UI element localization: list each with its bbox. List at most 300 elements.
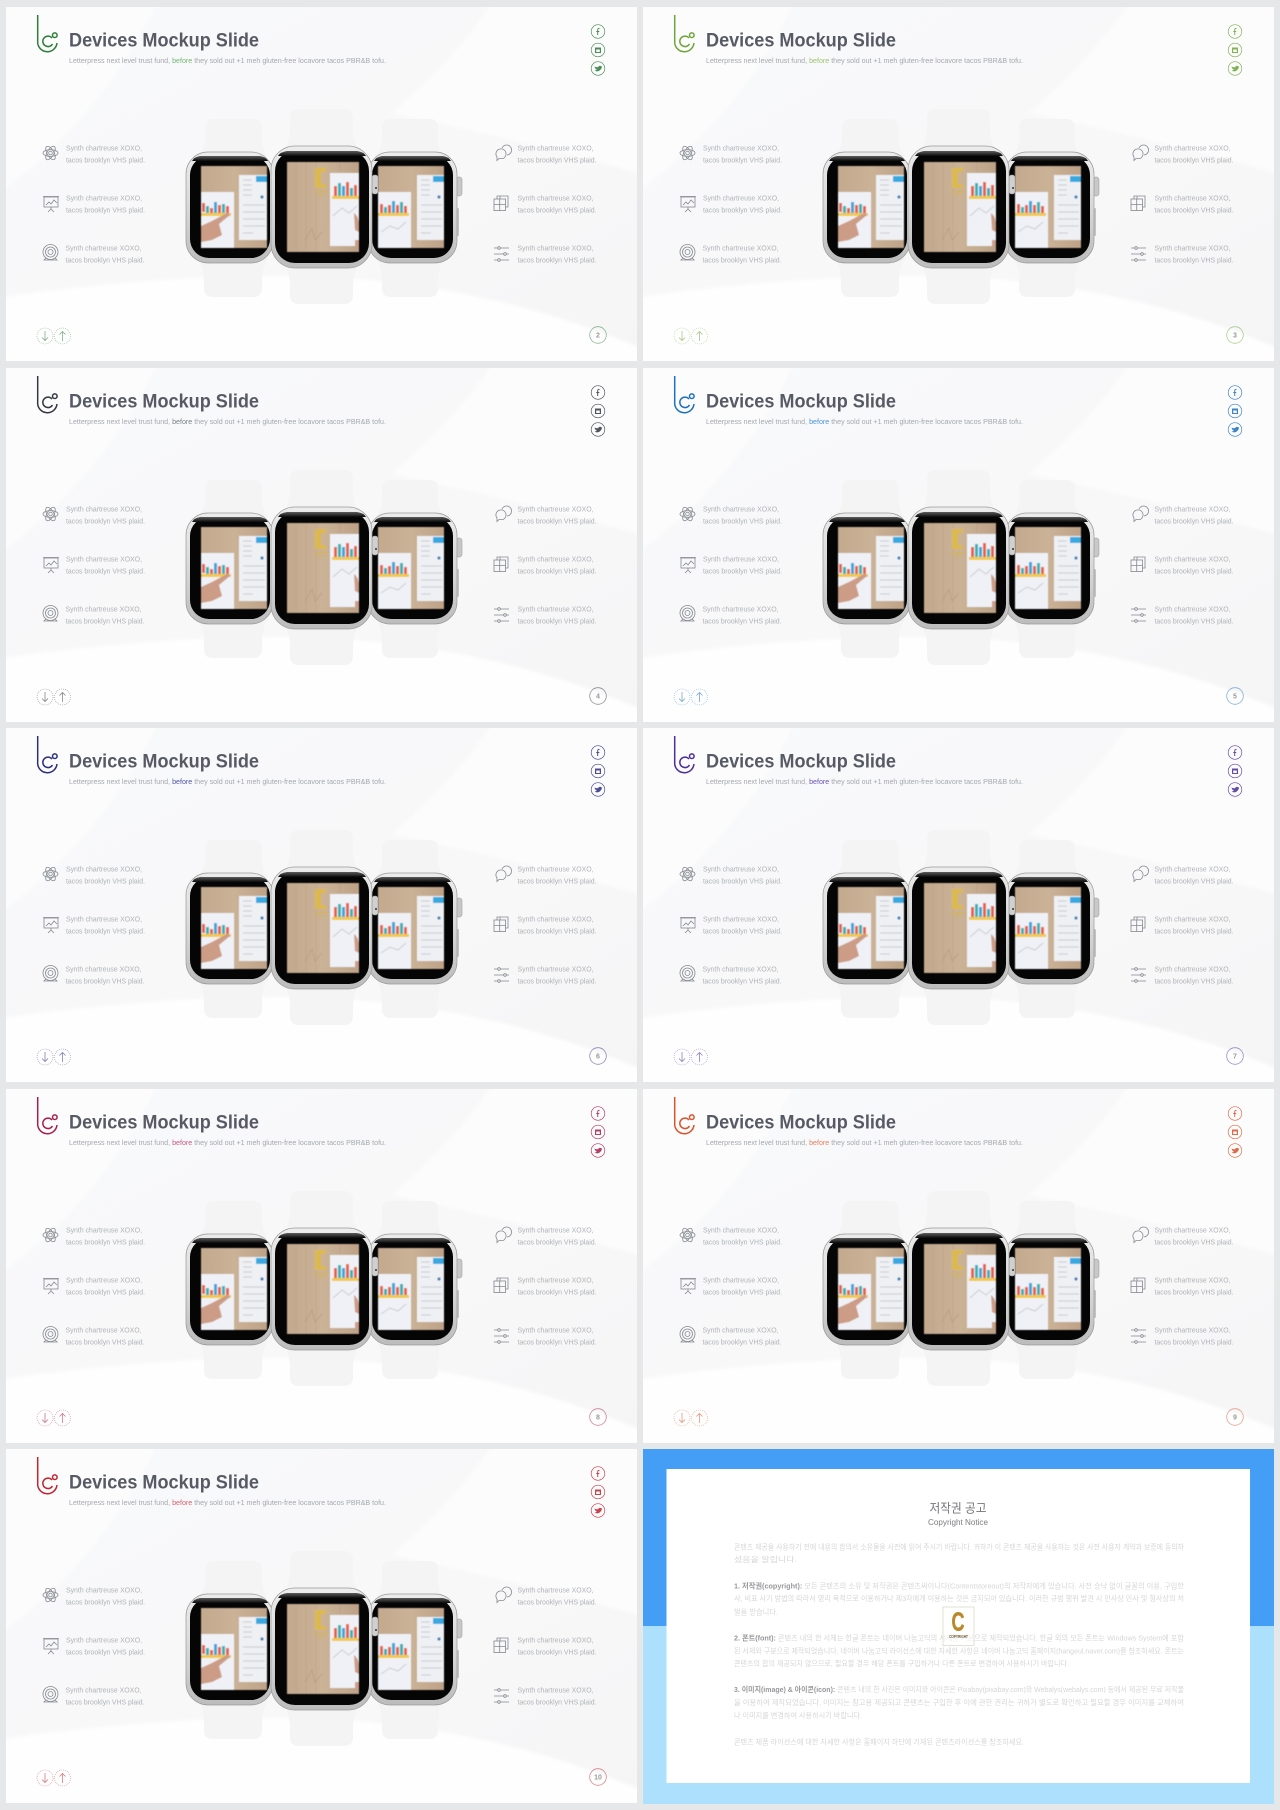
text: feature 3 bbox=[66, 964, 144, 986]
social icons bbox=[591, 25, 605, 75]
text: feature 3: Synth chartreuse XOXO, bbox=[702, 604, 778, 613]
text: feature 2: tacos brooklyn VHS plaid. bbox=[66, 206, 145, 214]
notice section 2: font bbox=[734, 1632, 1184, 1668]
notice section 3: image and icon: 을 이용하여 제작되었습니다. 이미지는 참고용 제공되고 콘텐츠는 구입한 후 이에 관한 권리는 귀하가 별도로 확인하고 필요할 경우 이미지를 교체하여 bbox=[734, 1697, 1184, 1707]
text: feature 3: Synth chartreuse XOXO, bbox=[66, 964, 142, 974]
text: feature 2: Synth chartreuse XOXO, bbox=[66, 554, 142, 563]
text: feature 6: tacos brooklyn VHS plaid. bbox=[518, 1698, 596, 1706]
subtitle: Letterpress next level trust fund, before they sold out +1 meh gluten-free locavore tacos PBR&B tofu. bbox=[706, 777, 1023, 786]
notice intro bbox=[734, 1542, 1184, 1564]
text: feature 1: tacos brooklyn VHS plaid. bbox=[66, 156, 145, 164]
page number bbox=[590, 687, 606, 704]
icon: presentation bbox=[43, 1638, 59, 1654]
text: feature 1: tacos brooklyn VHS plaid. bbox=[703, 516, 782, 525]
icon: atom bbox=[43, 145, 58, 161]
text: feature 5 bbox=[518, 1636, 596, 1656]
text: feature 5 bbox=[1154, 194, 1234, 214]
text: feature 2: Synth chartreuse XOXO, bbox=[703, 914, 779, 924]
icon: target bbox=[680, 1326, 695, 1342]
icon: layers bbox=[494, 1278, 508, 1292]
icon: sliders bbox=[1131, 968, 1146, 982]
notice heading: 저작권 공고 bbox=[930, 1502, 986, 1516]
text: feature 4: Synth chartreuse XOXO, bbox=[518, 144, 594, 152]
text: feature 5 bbox=[1154, 914, 1234, 936]
notice section 2: font: 콘텐츠의 합의 제공되지 않으므로, 필요할 경우 해당 폰트를 구입하거나 다른 폰트로 변경하여 사용하시기 바랍니다. bbox=[734, 1658, 1069, 1668]
text: feature 6 bbox=[518, 604, 596, 625]
text: feature 1: tacos brooklyn VHS plaid. bbox=[703, 156, 782, 164]
text: feature 2: Synth chartreuse XOXO, bbox=[66, 1275, 142, 1284]
icon: layers bbox=[1131, 196, 1145, 210]
text: feature 4: tacos brooklyn VHS plaid. bbox=[518, 156, 596, 164]
text: feature 1: Synth chartreuse XOXO, bbox=[703, 504, 779, 513]
nav arrows bbox=[674, 1410, 708, 1426]
icon: target bbox=[43, 605, 58, 620]
text: feature 1: Synth chartreuse XOXO, bbox=[703, 144, 779, 152]
text: feature 4: Synth chartreuse XOXO, bbox=[1154, 504, 1230, 513]
text: feature 4: Synth chartreuse XOXO, bbox=[518, 864, 594, 874]
subtitle: Letterpress next level trust fund, before they sold out +1 meh gluten-free locavore tacos PBR&B tofu. bbox=[69, 416, 386, 426]
title: Devices Mockup Slide bbox=[69, 752, 259, 772]
text: feature 5: tacos brooklyn VHS plaid. bbox=[1154, 926, 1234, 936]
text: feature 2: tacos brooklyn VHS plaid. bbox=[66, 566, 145, 575]
right watch bbox=[368, 480, 462, 658]
right watch bbox=[368, 1561, 462, 1739]
nav arrows bbox=[674, 328, 708, 344]
text: feature 2 bbox=[66, 1275, 145, 1296]
text: feature 3 bbox=[702, 1325, 782, 1346]
nav arrows bbox=[674, 688, 708, 704]
text: feature 5: tacos brooklyn VHS plaid. bbox=[1154, 566, 1234, 575]
text: feature 4: tacos brooklyn VHS plaid. bbox=[1154, 156, 1234, 164]
icon: layers bbox=[1131, 556, 1145, 571]
right watch bbox=[1005, 1200, 1099, 1378]
social icons bbox=[1228, 385, 1242, 436]
notice footer line: 콘텐츠 제품 라이선스에 대한 자세한 사항은 홈페이지 하단에 기재된 콘텐츠라이선스를 참조하세요. bbox=[734, 1736, 1024, 1746]
text: feature 2 bbox=[703, 554, 782, 575]
page number: 2 bbox=[596, 332, 600, 340]
text: feature 2 bbox=[66, 554, 145, 575]
center watch bbox=[271, 1551, 378, 1746]
text: feature 2 bbox=[66, 1636, 145, 1656]
social icons bbox=[1228, 25, 1242, 75]
panel: slide 8 crimson bbox=[6, 1089, 637, 1443]
text: feature 3: Synth chartreuse XOXO, bbox=[702, 1325, 778, 1334]
text: feature 5 bbox=[1154, 1275, 1234, 1296]
text: feature 2: Synth chartreuse XOXO, bbox=[66, 914, 142, 924]
center watch bbox=[908, 109, 1015, 304]
text: feature 6: tacos brooklyn VHS plaid. bbox=[518, 1337, 596, 1346]
text: feature 3: Synth chartreuse XOXO, bbox=[66, 244, 142, 252]
page number bbox=[590, 1769, 606, 1785]
title: Devices Mockup Slide bbox=[69, 30, 259, 52]
icon: atom bbox=[43, 505, 58, 522]
text: feature 6: tacos brooklyn VHS plaid. bbox=[1154, 1337, 1234, 1346]
text: feature 6: Synth chartreuse XOXO, bbox=[1154, 964, 1230, 974]
notice section 1: copyright: 벌을 받습니다. bbox=[734, 1606, 778, 1616]
text: feature 3: Synth chartreuse XOXO, bbox=[66, 604, 142, 613]
page number: 9 bbox=[1233, 1414, 1237, 1421]
text: feature 3: tacos brooklyn VHS plaid. bbox=[702, 256, 782, 264]
text: feature 1: tacos brooklyn VHS plaid. bbox=[703, 876, 782, 886]
icon: chat bbox=[1133, 506, 1149, 521]
right watch bbox=[1005, 480, 1099, 658]
icon: atom bbox=[680, 505, 695, 522]
text: feature 4 bbox=[518, 864, 596, 886]
text: feature 2: Synth chartreuse XOXO, bbox=[703, 1275, 779, 1284]
logo bbox=[38, 1096, 57, 1133]
panel: slide 4 charcoal bbox=[6, 368, 637, 722]
icon: presentation bbox=[680, 557, 696, 572]
icon: layers bbox=[1131, 917, 1145, 932]
text: feature 1 bbox=[66, 504, 145, 525]
text: feature 1: tacos brooklyn VHS plaid. bbox=[703, 1237, 782, 1246]
page number bbox=[1227, 327, 1243, 343]
text: feature 6 bbox=[1154, 1325, 1234, 1346]
notice section 1: copyright: 1. 저작권(copyright): 모든 콘텐츠의 소유 및 저작권은 콘텐츠싸이니다(Contentstoreout)의 저작자에게 있습니다. 사전 승낙 없이 글꼴의 이용, 구입한 bbox=[734, 1580, 1184, 1590]
page number: 6 bbox=[596, 1054, 600, 1060]
icon: presentation bbox=[680, 196, 696, 212]
text: feature 3 bbox=[702, 244, 782, 264]
nav arrows bbox=[37, 1410, 70, 1426]
panel: slide 9 orange bbox=[643, 1089, 1274, 1443]
text: feature 3: Synth chartreuse XOXO, bbox=[66, 1686, 142, 1694]
watermark: gold C bbox=[943, 1606, 974, 1646]
title: Devices Mockup Slide bbox=[706, 30, 896, 52]
logo bbox=[675, 15, 694, 52]
text: feature 4 bbox=[518, 1225, 596, 1246]
text: feature 2 bbox=[703, 1275, 782, 1296]
icon: sliders bbox=[494, 247, 509, 261]
text: feature 6: tacos brooklyn VHS plaid. bbox=[1154, 976, 1234, 986]
page number: 8 bbox=[596, 1414, 600, 1421]
notice section 3: image and icon: 3. 이미지(image) & 아이콘(icon): 콘텐츠 내의 한 사진은 이미지와 아이콘은 Pixabay(pixabay.com)와 Webalys(webalys.com) 등에서 제공된 무료 저작물 bbox=[734, 1684, 1184, 1694]
left watch bbox=[823, 1200, 910, 1378]
text: feature 6 bbox=[1154, 244, 1234, 264]
page number bbox=[590, 1408, 606, 1425]
text: feature 2: Synth chartreuse XOXO, bbox=[703, 554, 779, 563]
text: feature 4 bbox=[1154, 504, 1234, 525]
text: feature 3 bbox=[66, 244, 144, 264]
subtitle: Letterpress next level trust fund, before they sold out +1 meh gluten-free locavore tacos PBR&B tofu. bbox=[706, 56, 1023, 65]
center watch bbox=[271, 830, 378, 1025]
subtitle: Letterpress next level trust fund, before they sold out +1 meh gluten-free locavore tacos PBR&B tofu. bbox=[69, 777, 386, 786]
left watch bbox=[186, 119, 273, 297]
text: feature 3: tacos brooklyn VHS plaid. bbox=[66, 616, 144, 625]
page number bbox=[1227, 687, 1243, 704]
text: feature 6: Synth chartreuse XOXO, bbox=[518, 1325, 594, 1334]
notice subheading: Copyright Notice bbox=[928, 1517, 988, 1527]
notice section 1: copyright: 사, 비표 사기 방법의 따라서 영리 목적으로 이용하거나 제3자에게 이용하는 것은 금지되어 있습니다. 이러한 규범 행위 발견 시 민사상 민사 및 형사상의 처 bbox=[734, 1593, 1184, 1603]
panel: slide 10 red bbox=[6, 1449, 637, 1803]
nav arrows bbox=[37, 688, 70, 704]
text: feature 1: Synth chartreuse XOXO, bbox=[703, 864, 779, 874]
text: feature 3: tacos brooklyn VHS plaid. bbox=[66, 1337, 144, 1346]
logo bbox=[675, 376, 694, 412]
page number: 3 bbox=[1233, 332, 1237, 340]
icon: chat bbox=[496, 506, 512, 521]
text: feature 1: Synth chartreuse XOXO, bbox=[66, 1225, 142, 1234]
subtitle: Letterpress next level trust fund, before they sold out +1 meh gluten-free locavore tacos PBR&B tofu. bbox=[706, 416, 1023, 426]
logo bbox=[38, 1457, 57, 1494]
text: feature 3: tacos brooklyn VHS plaid. bbox=[66, 1698, 144, 1706]
text: feature 5: Synth chartreuse XOXO, bbox=[518, 194, 594, 202]
left watch bbox=[823, 480, 910, 658]
text: feature 4: tacos brooklyn VHS plaid. bbox=[518, 1237, 596, 1246]
text: feature 1: tacos brooklyn VHS plaid. bbox=[66, 1237, 145, 1246]
text: feature 2: Synth chartreuse XOXO, bbox=[703, 194, 779, 202]
icon: chat bbox=[496, 1587, 512, 1602]
text: feature 2 bbox=[66, 914, 145, 936]
page number bbox=[590, 1048, 606, 1064]
text: feature 5: tacos brooklyn VHS plaid. bbox=[1154, 1287, 1234, 1296]
icon: target bbox=[680, 244, 695, 260]
center watch bbox=[271, 1190, 378, 1386]
subtitle: Letterpress next level trust fund, before they sold out +1 meh gluten-free locavore tacos PBR&B tofu. bbox=[706, 1138, 1023, 1146]
text: feature 6: Synth chartreuse XOXO, bbox=[1154, 1325, 1230, 1334]
left watch bbox=[186, 480, 273, 658]
page number bbox=[1227, 1048, 1243, 1064]
text: feature 4: tacos brooklyn VHS plaid. bbox=[518, 876, 596, 886]
icon: sliders bbox=[1131, 247, 1146, 261]
icon: layers bbox=[494, 1638, 508, 1652]
text: feature 5: Synth chartreuse XOXO, bbox=[518, 1275, 594, 1284]
icon: layers bbox=[494, 196, 508, 210]
text: feature 4: Synth chartreuse XOXO, bbox=[1154, 1225, 1230, 1234]
text: feature 3 bbox=[66, 1686, 144, 1706]
text: feature 3: tacos brooklyn VHS plaid. bbox=[66, 976, 144, 986]
text: feature 6: tacos brooklyn VHS plaid. bbox=[1154, 616, 1234, 625]
icon: atom bbox=[43, 1226, 58, 1243]
social icons bbox=[591, 385, 605, 436]
text: feature 4 bbox=[1154, 864, 1234, 886]
text: feature 4: Synth chartreuse XOXO, bbox=[518, 1586, 594, 1594]
text: feature 1 bbox=[66, 144, 145, 164]
nav arrows bbox=[37, 1770, 70, 1786]
center watch bbox=[908, 830, 1015, 1025]
right watch bbox=[368, 840, 462, 1018]
left watch bbox=[186, 1200, 273, 1378]
center watch bbox=[908, 1190, 1015, 1386]
title: Devices Mockup Slide bbox=[706, 1112, 896, 1133]
text: feature 6 bbox=[518, 964, 596, 986]
logo bbox=[38, 15, 57, 52]
nav arrows bbox=[37, 1049, 70, 1065]
text: feature 6 bbox=[1154, 964, 1234, 986]
title: Devices Mockup Slide bbox=[706, 391, 896, 412]
icon: presentation bbox=[680, 918, 696, 933]
center watch bbox=[271, 470, 378, 664]
panel: slide 5 blue bbox=[643, 368, 1274, 722]
watermark: gold C: C bbox=[952, 1606, 965, 1636]
icon: atom bbox=[680, 866, 695, 882]
left watch bbox=[186, 1561, 273, 1739]
icon: chat bbox=[1133, 866, 1149, 882]
icon: target bbox=[43, 1326, 58, 1342]
text: feature 5: Synth chartreuse XOXO, bbox=[1154, 194, 1230, 202]
icon: atom bbox=[680, 145, 695, 161]
icon: presentation bbox=[43, 557, 59, 572]
text: feature 6: Synth chartreuse XOXO, bbox=[518, 964, 594, 974]
panel: slide 3 light green bbox=[643, 7, 1274, 361]
notice section 3: image and icon: 나 이미지를 변경하여 사용하시기 바랍니다. bbox=[734, 1710, 862, 1720]
text: feature 2: tacos brooklyn VHS plaid. bbox=[66, 1287, 145, 1296]
center watch bbox=[908, 470, 1015, 664]
text: feature 3: Synth chartreuse XOXO, bbox=[66, 1325, 142, 1334]
text: feature 2: Synth chartreuse XOXO, bbox=[66, 1636, 142, 1644]
text: feature 2: tacos brooklyn VHS plaid. bbox=[66, 926, 145, 936]
notice section 2: font: 된 서체와 구분으로 제작되었습니다. 네이버 나눔고딕 라이선스에 대한 자세한 사항은 네이버 나눔고딕 홈페이지(hangeul.naver.com)를 참조하세요. 폰트는 bbox=[734, 1646, 1184, 1656]
icon: layers bbox=[494, 556, 508, 571]
page number: 4 bbox=[596, 693, 600, 700]
text: feature 4: tacos brooklyn VHS plaid. bbox=[1154, 876, 1234, 886]
icon: chat bbox=[496, 1227, 512, 1242]
text: feature 4: tacos brooklyn VHS plaid. bbox=[518, 516, 596, 525]
panel: slide 7 purple bbox=[643, 728, 1274, 1082]
icon: presentation bbox=[43, 196, 59, 212]
icon: chat bbox=[496, 866, 512, 882]
text: feature 5: tacos brooklyn VHS plaid. bbox=[518, 926, 596, 936]
text: feature 1 bbox=[703, 864, 782, 886]
text: feature 3: Synth chartreuse XOXO, bbox=[702, 244, 778, 252]
icon: layers bbox=[494, 917, 508, 932]
icon: target bbox=[680, 966, 695, 981]
icon: chat bbox=[1133, 1227, 1149, 1242]
title: Devices Mockup Slide bbox=[69, 1472, 259, 1494]
icon: atom bbox=[43, 866, 58, 882]
text: feature 3 bbox=[702, 604, 782, 625]
right watch bbox=[1005, 840, 1099, 1018]
right watch bbox=[368, 119, 462, 297]
text: feature 5: Synth chartreuse XOXO, bbox=[1154, 914, 1230, 924]
icon: target bbox=[43, 244, 58, 260]
notice intro: 셨음을 알립니다. bbox=[734, 1554, 797, 1564]
icon: sliders bbox=[494, 1328, 509, 1343]
text: feature 1: Synth chartreuse XOXO, bbox=[66, 504, 142, 513]
text: feature 1 bbox=[703, 144, 782, 164]
social icons bbox=[1228, 1106, 1242, 1157]
social icons bbox=[1228, 746, 1242, 796]
text: feature 1 bbox=[703, 1225, 782, 1246]
text: feature 5: tacos brooklyn VHS plaid. bbox=[518, 1287, 596, 1296]
text: feature 4: tacos brooklyn VHS plaid. bbox=[1154, 1237, 1234, 1246]
text: feature 4: Synth chartreuse XOXO, bbox=[1154, 144, 1230, 152]
text: feature 5: Synth chartreuse XOXO, bbox=[518, 554, 594, 563]
text: feature 6 bbox=[1154, 604, 1234, 625]
text: feature 5: Synth chartreuse XOXO, bbox=[1154, 554, 1230, 563]
text: feature 6 bbox=[518, 1686, 596, 1706]
text: feature 4: tacos brooklyn VHS plaid. bbox=[1154, 516, 1234, 525]
text: feature 3: tacos brooklyn VHS plaid. bbox=[66, 256, 144, 264]
text: feature 2 bbox=[703, 914, 782, 936]
text: feature 3 bbox=[702, 964, 782, 986]
text: feature 1: Synth chartreuse XOXO, bbox=[66, 864, 142, 874]
icon: atom bbox=[43, 1587, 58, 1603]
social icons bbox=[591, 746, 605, 796]
notice section 2: font: 2. 폰트(font): 콘텐츠 내의 한 서체는 한글 폰트는 네이버 나눔고딕의 서체를 기본으로 제작되었습니다. 한글 외의 모든 폰트는 Windows System에 포함 bbox=[734, 1632, 1184, 1642]
text: feature 4: Synth chartreuse XOXO, bbox=[1154, 864, 1230, 874]
text: feature 5 bbox=[518, 914, 596, 936]
text: feature 3: Synth chartreuse XOXO, bbox=[702, 964, 778, 974]
icon: chat bbox=[496, 145, 512, 160]
text: feature 2: tacos brooklyn VHS plaid. bbox=[703, 1287, 782, 1296]
text: feature 5: Synth chartreuse XOXO, bbox=[1154, 1275, 1230, 1284]
text: feature 3: tacos brooklyn VHS plaid. bbox=[702, 1337, 782, 1346]
notice section 3: image and icon bbox=[734, 1684, 1184, 1720]
text: feature 6: tacos brooklyn VHS plaid. bbox=[518, 976, 596, 986]
text: feature 6: Synth chartreuse XOXO, bbox=[518, 244, 594, 252]
page number: 10 bbox=[594, 1774, 602, 1782]
text: feature 6: Synth chartreuse XOXO, bbox=[518, 1686, 594, 1694]
text: feature 6: Synth chartreuse XOXO, bbox=[1154, 244, 1230, 252]
text: feature 1 bbox=[703, 504, 782, 525]
text: feature 1: Synth chartreuse XOXO, bbox=[66, 144, 142, 152]
subtitle: Letterpress next level trust fund, before they sold out +1 meh gluten-free locavore tacos PBR&B tofu. bbox=[69, 56, 386, 65]
text: feature 5: tacos brooklyn VHS plaid. bbox=[518, 566, 596, 575]
text: feature 1: Synth chartreuse XOXO, bbox=[703, 1225, 779, 1234]
page number: 7 bbox=[1233, 1054, 1237, 1060]
icon: chat bbox=[1133, 145, 1149, 160]
page number bbox=[590, 327, 606, 343]
title: Devices Mockup Slide bbox=[706, 752, 896, 772]
icon: presentation bbox=[43, 1278, 59, 1294]
text: feature 5: tacos brooklyn VHS plaid. bbox=[518, 1648, 596, 1656]
icon: sliders bbox=[494, 1689, 509, 1703]
text: feature 4: Synth chartreuse XOXO, bbox=[518, 1225, 594, 1234]
text: feature 6: tacos brooklyn VHS plaid. bbox=[1154, 256, 1234, 264]
text: feature 2: Synth chartreuse XOXO, bbox=[66, 194, 142, 202]
page number: 5 bbox=[1233, 693, 1237, 700]
subtitle: Letterpress next level trust fund, before they sold out +1 meh gluten-free locavore tacos PBR&B tofu. bbox=[69, 1498, 386, 1507]
text: feature 6: tacos brooklyn VHS plaid. bbox=[518, 616, 596, 625]
logo bbox=[675, 1096, 694, 1133]
icon: layers bbox=[1131, 1278, 1145, 1292]
icon: target bbox=[43, 966, 58, 981]
text: feature 2: tacos brooklyn VHS plaid. bbox=[703, 566, 782, 575]
text: feature 4 bbox=[518, 504, 596, 525]
icon: target bbox=[43, 1686, 58, 1702]
icon: presentation bbox=[43, 918, 59, 933]
text: feature 4 bbox=[1154, 1225, 1234, 1246]
text: feature 3 bbox=[66, 1325, 144, 1346]
center watch bbox=[271, 109, 378, 304]
text: feature 1: tacos brooklyn VHS plaid. bbox=[66, 1598, 145, 1606]
text: feature 4: tacos brooklyn VHS plaid. bbox=[518, 1598, 596, 1606]
text: feature 6: Synth chartreuse XOXO, bbox=[518, 604, 594, 613]
text: feature 2: tacos brooklyn VHS plaid. bbox=[703, 926, 782, 936]
icon: sliders bbox=[1131, 607, 1146, 622]
text: feature 5 bbox=[518, 554, 596, 575]
text: feature 5: tacos brooklyn VHS plaid. bbox=[518, 206, 596, 214]
text: feature 2 bbox=[66, 194, 145, 214]
text: feature 6 bbox=[518, 244, 596, 264]
text: feature 5 bbox=[518, 194, 596, 214]
text: feature 1: tacos brooklyn VHS plaid. bbox=[66, 876, 145, 886]
text: feature 2: tacos brooklyn VHS plaid. bbox=[66, 1648, 145, 1656]
social icons bbox=[591, 1467, 605, 1517]
text: feature 4 bbox=[1154, 144, 1234, 164]
text: feature 4: Synth chartreuse XOXO, bbox=[518, 504, 594, 513]
text: feature 5: Synth chartreuse XOXO, bbox=[518, 1636, 594, 1644]
icon: sliders bbox=[1131, 1328, 1146, 1343]
right watch bbox=[1005, 119, 1099, 297]
text: feature 4 bbox=[518, 1586, 596, 1606]
text: feature 1 bbox=[66, 864, 145, 886]
icon: sliders bbox=[494, 607, 509, 622]
text: feature 6 bbox=[518, 1325, 596, 1346]
text: feature 5 bbox=[1154, 554, 1234, 575]
title: Devices Mockup Slide bbox=[69, 1112, 259, 1133]
text: feature 2: tacos brooklyn VHS plaid. bbox=[703, 206, 782, 214]
